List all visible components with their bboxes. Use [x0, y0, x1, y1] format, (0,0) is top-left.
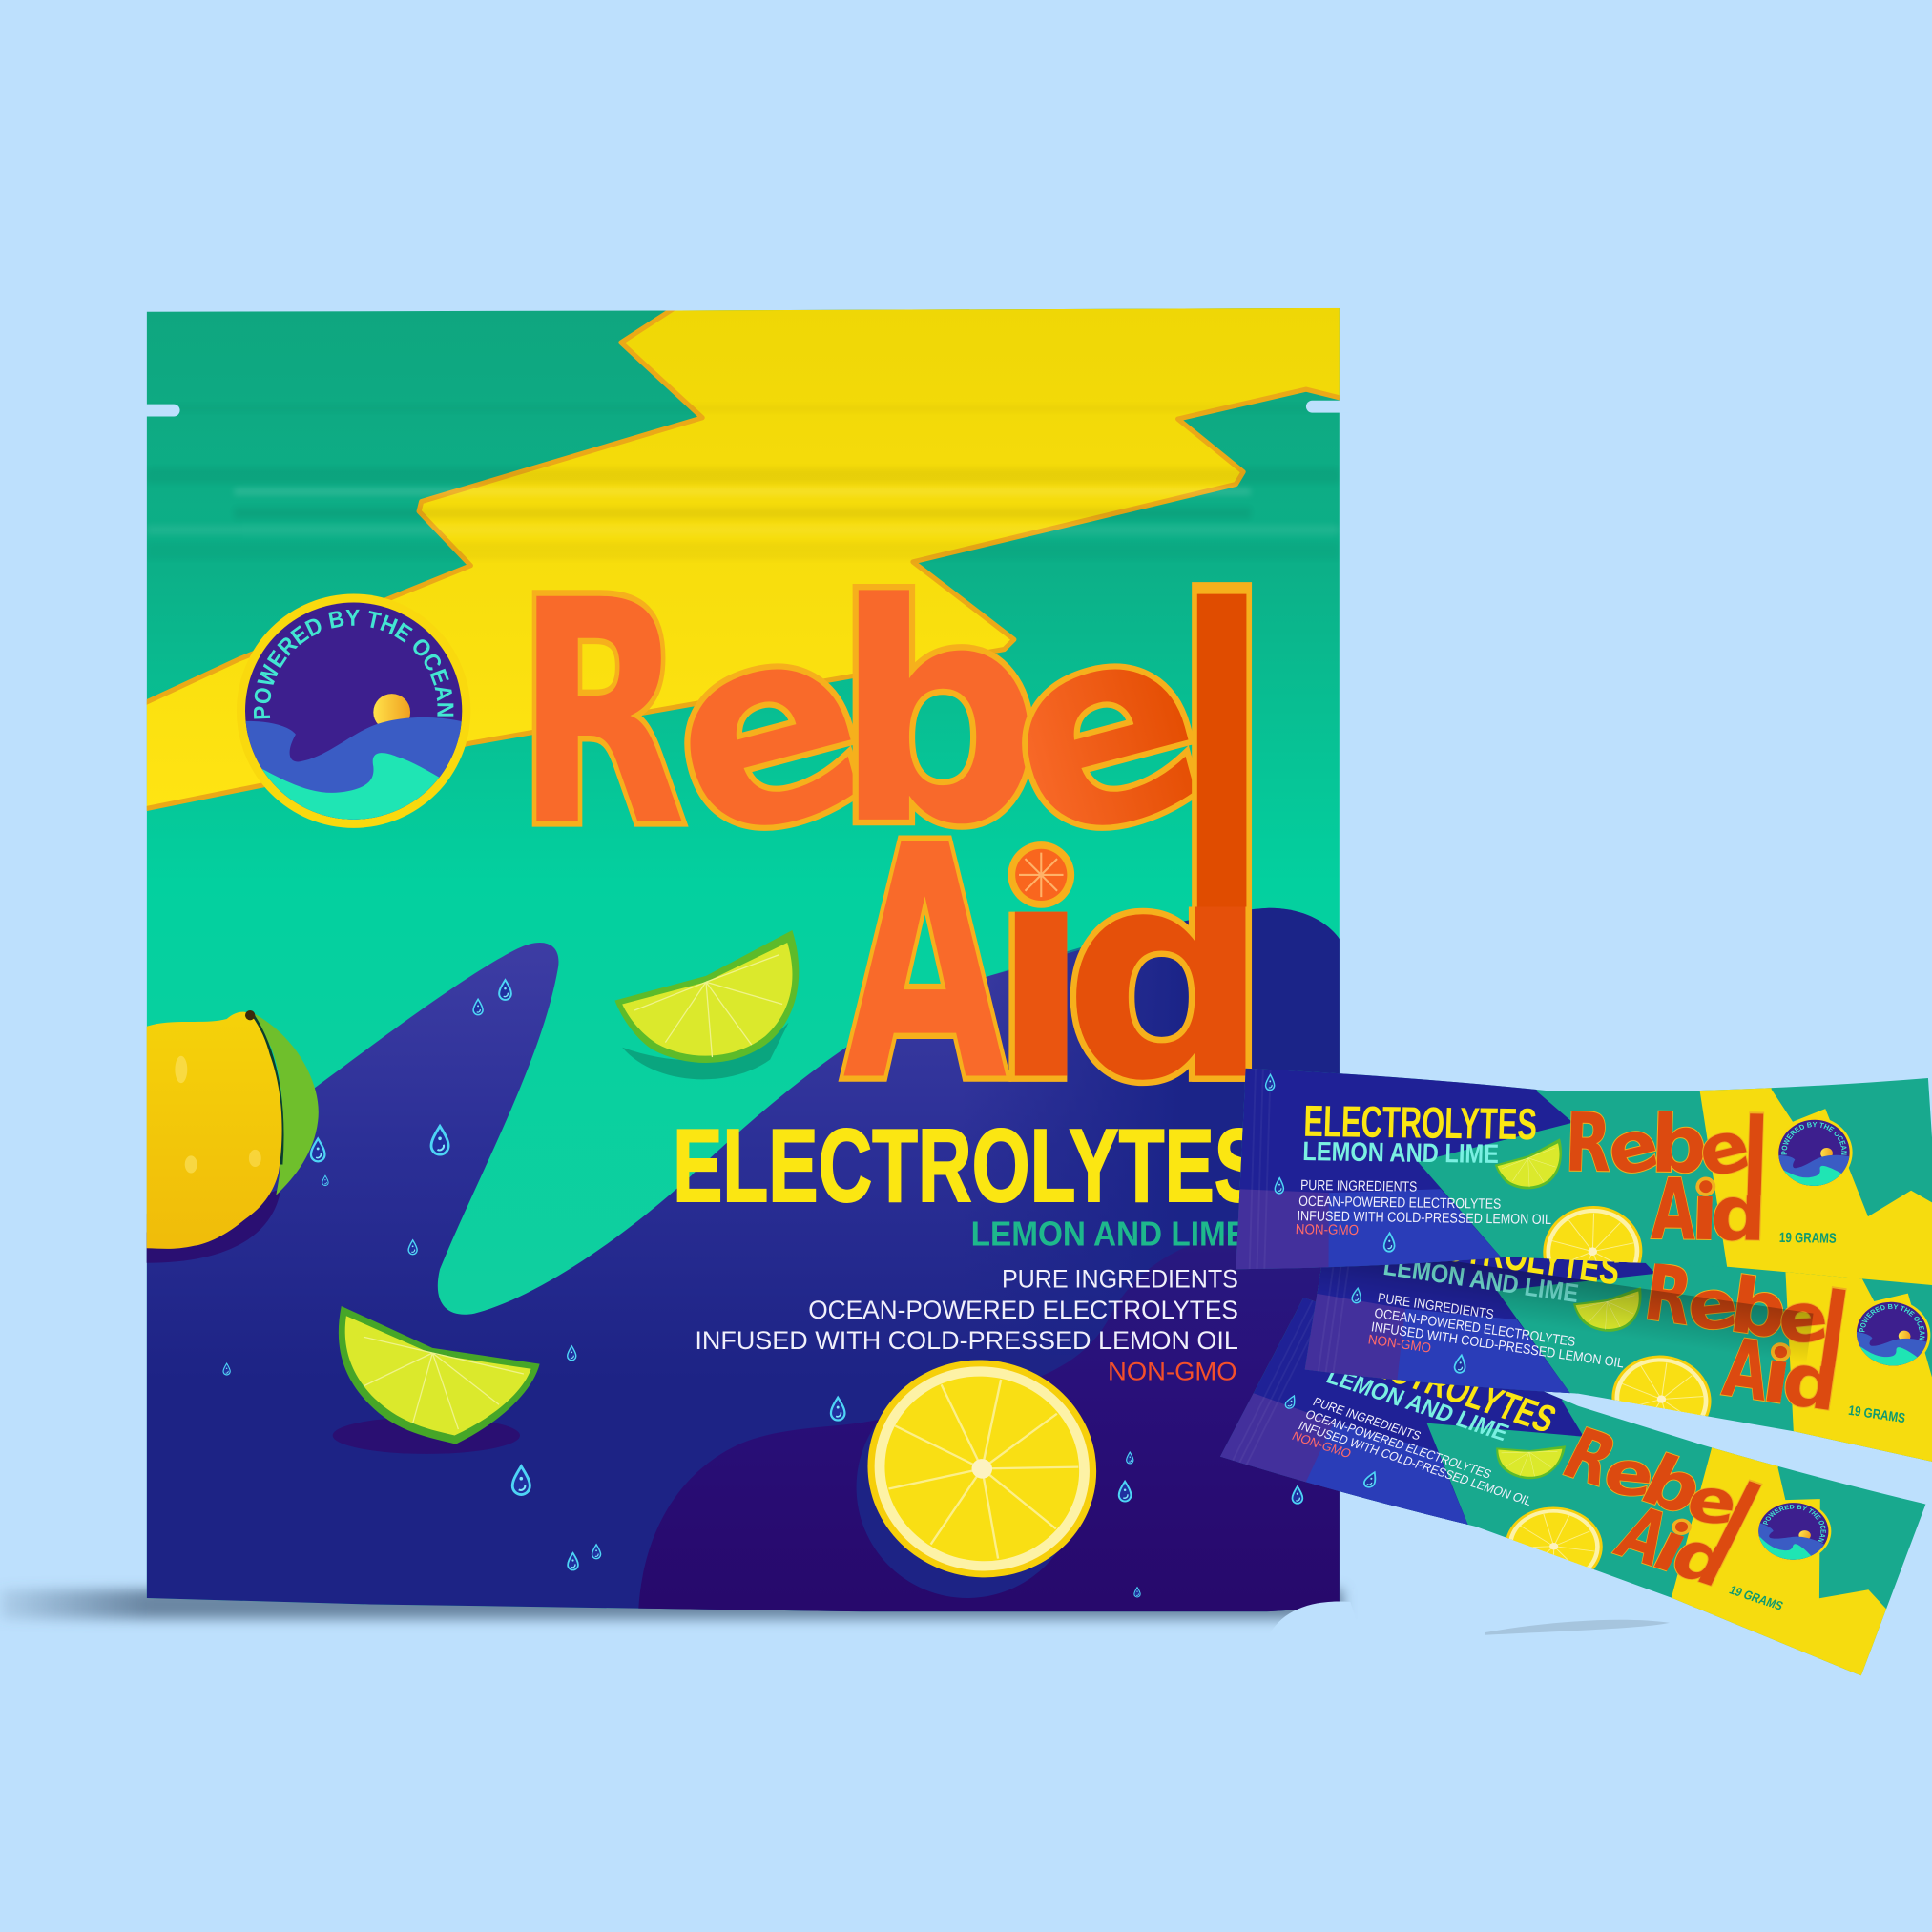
- water droplets: [223, 980, 1302, 1597]
- sachet 3: bottom stick pack: OCEAN-POWERED ELECTROLYTES: [1303, 1407, 1494, 1481]
- logo: Rebel Aid: A: [842, 779, 1008, 1153]
- sachet 1: top stick pack: [1236, 1069, 1932, 1285]
- sachet 2: middle stick pack: A: [1717, 1321, 1775, 1421]
- sachet 2: middle stick pack: e: [1682, 1264, 1742, 1347]
- cutout at bag corner: [1267, 1602, 1368, 1657]
- sachet 3: bottom stick pack: 19 GRAMS: [1727, 1583, 1786, 1613]
- sachet 3: bottom stick pack: INFUSED WITH COLD-PRESSED LEMON OIL: [1297, 1419, 1534, 1508]
- logo: Rebel Aid: d: [1064, 808, 1270, 1144]
- sachet 2: middle stick pack: b: [1725, 1261, 1793, 1357]
- sachet 3: bottom stick pack: POWERED BY THE OCEAN: [1763, 1505, 1826, 1543]
- lemon slice: [847, 1339, 1116, 1599]
- sachet 3: bottom stick pack: b: [1629, 1441, 1716, 1531]
- faint shadow under sachets: [1485, 1620, 1670, 1635]
- sachet 1: top stick pack: R: [1564, 1095, 1612, 1191]
- lime wedge shadow upper: [622, 1023, 789, 1079]
- dark purple wave: [638, 1214, 1341, 1614]
- sachet 3: bottom stick pack: e: [1682, 1465, 1742, 1539]
- sachet 2: middle stick pack: PURE INGREDIENTS: [1377, 1290, 1495, 1321]
- bag ground shadow: [0, 1589, 1343, 1619]
- notch right: [1306, 401, 1356, 413]
- sachet 1: top stick pack: A: [1650, 1160, 1697, 1259]
- sachet 3: bottom stick pack: A: [1604, 1491, 1683, 1583]
- whole lemon with leaf: [147, 1010, 319, 1249]
- benefit list: NON-GMO: [1108, 1356, 1237, 1385]
- sachet 2: middle stick pack: NON-GMO: [1367, 1331, 1432, 1356]
- sachet 2: middle stick pack: l: [1804, 1261, 1856, 1446]
- sachet 3: bottom stick pack: R: [1550, 1414, 1630, 1503]
- lime wedge lower: [339, 1306, 540, 1444]
- sachet 1: top stick pack: e: [1599, 1102, 1667, 1193]
- sachet 1: top stick pack: OCEAN-POWERED ELECTROLYTES: [1298, 1194, 1501, 1213]
- sachet 3: bottom stick pack: i: [1640, 1506, 1703, 1589]
- benefit list: INFUSED WITH COLD-PRESSED LEMON OIL: [695, 1325, 1238, 1355]
- logo: Rebel Aid: i: [989, 794, 1093, 1148]
- sachet 3: bottom stick pack: e: [1599, 1437, 1659, 1511]
- navy right shade: [992, 908, 1340, 1263]
- sachet 3: bottom stick pack: d: [1659, 1515, 1745, 1602]
- zipper creases: [147, 469, 1339, 551]
- sachet 3: bottom stick pack: PURE INGREDIENTS: [1311, 1395, 1423, 1443]
- benefit list: PURE INGREDIENTS: [1002, 1264, 1238, 1294]
- lightning bolt: [135, 301, 1350, 811]
- sachet 3: bottom stick pack: NON-GMO: [1290, 1428, 1354, 1461]
- sachet 3: bottom stick pack: [1220, 1298, 1925, 1675]
- icon: orange slice i-dot: [1008, 841, 1074, 908]
- notch left: [135, 405, 180, 417]
- sachet 1: top stick pack: LEMON AND LIME: [1302, 1135, 1499, 1169]
- sachet 1: top stick pack: b: [1650, 1098, 1709, 1192]
- benefit list: OCEAN-POWERED ELECTROLYTES: [808, 1295, 1238, 1324]
- badge: powered by the ocean: POWERED BY THE OCEAN: [254, 609, 454, 719]
- logo: Rebel Aid: e: [974, 554, 1234, 904]
- sachet 2: middle stick pack: e: [1773, 1277, 1833, 1361]
- sachet 3: bottom stick pack: l: [1678, 1458, 1778, 1617]
- sachet 2: middle stick pack: i: [1757, 1330, 1797, 1423]
- sachet 1: top stick pack: i: [1690, 1166, 1720, 1259]
- sachet 2: middle stick pack: INFUSED WITH COLD-PRESSED LEMON OIL: [1370, 1319, 1625, 1371]
- heading: electrolytes: ELECTROLYTES: [673, 1108, 1264, 1223]
- logo: Rebel Aid: R: [516, 535, 686, 894]
- sachet 1: top stick pack: l: [1738, 1087, 1771, 1278]
- benefit list: [695, 1264, 1238, 1385]
- sachet 2: middle stick pack: d: [1777, 1337, 1844, 1428]
- pouch artwork background: [135, 301, 1350, 1614]
- lime wedge upper: [614, 930, 799, 1063]
- sachet 2: middle stick pack: OCEAN-POWERED ELECTROLYTES: [1374, 1305, 1576, 1349]
- lemon slice shadow: [857, 1377, 1078, 1598]
- sachet 1: top stick pack: 19 GRAMS: [1779, 1230, 1837, 1247]
- sachet 3: bottom stick pack: LEMON AND LIME: [1322, 1363, 1513, 1446]
- logo: Rebel Aid: l: [1174, 490, 1270, 1218]
- logo: Rebel Aid: e: [636, 554, 896, 904]
- sachet 1: top stick pack: NON-GMO: [1296, 1222, 1359, 1238]
- badge: powered by the ocean: [237, 593, 470, 828]
- sachet 1: top stick pack: POWERED BY THE OCEAN: [1781, 1122, 1847, 1154]
- sachet 1: top stick pack: d: [1710, 1169, 1768, 1257]
- flavour: lemon and lime: LEMON AND LIME: [971, 1215, 1247, 1254]
- logo: Rebel Aid: b: [834, 540, 1042, 891]
- sachet 2: middle stick pack: POWERED BY THE OCEAN: [1859, 1304, 1925, 1340]
- sachet 1: top stick pack: e: [1690, 1103, 1757, 1195]
- lime wedge shadow lower: [333, 1417, 520, 1454]
- sachet 2: middle stick pack: LEMON AND LIME: [1381, 1251, 1581, 1308]
- pouch: Rebel Aid electrolytes bag: [147, 307, 1394, 1612]
- logo: Rebel Aid: [516, 490, 1270, 1218]
- sachet 2: middle stick pack: R: [1639, 1248, 1697, 1343]
- sachet 1: top stick pack: INFUSED WITH COLD-PRESSED LEMON OIL: [1297, 1209, 1551, 1228]
- sachet 1: top stick pack: ELECTROLYTES: [1303, 1097, 1538, 1150]
- sachet 2: middle stick pack: 19 GRAMS: [1847, 1402, 1906, 1425]
- sachet 2: middle stick pack: [1305, 1214, 1932, 1462]
- sachet 3: bottom stick pack: ELECTROLYTES: [1331, 1331, 1563, 1441]
- sachet 1: top stick pack: PURE INGREDIENTS: [1300, 1177, 1418, 1195]
- navy wave: [147, 908, 1341, 1614]
- sachet 2: middle stick pack: ELECTROLYTES: [1384, 1214, 1623, 1295]
- lemon shadow: [147, 1189, 280, 1263]
